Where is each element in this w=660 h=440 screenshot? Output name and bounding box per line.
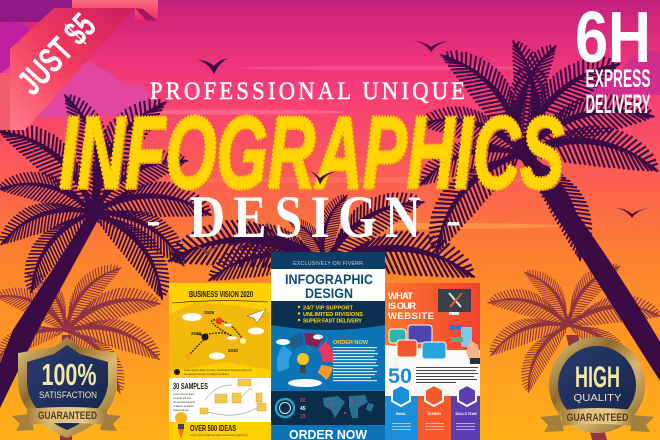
years: 2025 (204, 310, 215, 315)
bullet list: 24/7 VIP SUPPORT (303, 306, 354, 312)
panel: centre infographic card: EXCLUSIVELY ON FIVERR (293, 261, 363, 267)
panel: centre infographic card: DESIGN (305, 286, 353, 301)
panel: left infographic card: ut labore et dolore (173, 404, 194, 408)
card heading: business vision: BUSINESS VISION 2020 (189, 289, 253, 299)
title block (271, 269, 385, 301)
blue body with wave (271, 325, 385, 391)
caption row (174, 369, 180, 375)
panel: left infographic card (169, 283, 271, 440)
icon: small bird over title (305, 170, 338, 185)
badge: 100% satisfaction guaranteed: GUARANTEED (38, 410, 97, 422)
icon: bird far right (615, 208, 650, 218)
palm tree: centre behind cards (165, 174, 481, 285)
panel: centre infographic card: 23 (300, 414, 306, 420)
column labels: SEARCH (427, 412, 441, 416)
card heading: what is our website: WHAT (388, 291, 413, 302)
badge: high quality guaranteed: GUARANTEED (566, 412, 629, 424)
stats strip (271, 391, 385, 425)
panel: right infographic card (385, 283, 480, 440)
100%: 100% (42, 357, 96, 392)
panel: left infographic card: do eiusmod tempor incididunt ut labore (184, 372, 229, 376)
panel: centre infographic card: 45 (300, 406, 306, 412)
clouds on card (182, 313, 202, 321)
icon: bird right (412, 41, 448, 52)
30 samples heading: 30 SAMPLES (173, 382, 208, 391)
big number 50: 50 (388, 365, 412, 388)
panel: left infographic card: Lorem ipsum dolor sit amet, consectetur adipiscing elit sed (184, 368, 252, 372)
icon: light bulb (175, 412, 187, 439)
corner ribbon: just $5 (0, 0, 158, 130)
heading: design: DESIGN (189, 184, 421, 250)
panel: centre infographic card: INFOGRAPHIC (285, 272, 373, 287)
panel: left infographic card: 2020 (191, 331, 202, 336)
chart: world map (323, 395, 374, 418)
bullet list: SUPER FAST DELIVERY (303, 318, 362, 324)
ribbon (27, 407, 107, 425)
panel: left infographic card: magna aliqua (173, 408, 189, 412)
three colour columns (385, 396, 418, 440)
speech bubble tiles (389, 325, 446, 359)
palm tree: main left (0, 80, 215, 408)
stat numbers: 92 (300, 398, 306, 404)
icon: monitor with tools (438, 289, 471, 315)
panel: left infographic card: Lorem ipsum dolor (173, 392, 195, 396)
panel: centre infographic card (271, 252, 385, 440)
panel: left infographic card: Lorem ipsum dolor sit amet consectetur adipiscing (190, 433, 248, 437)
column labels: SKILLS TEAM (455, 412, 477, 416)
footer: order now (271, 425, 385, 440)
badge: high quality guaranteed (540, 337, 654, 433)
paragraph lines (416, 367, 478, 383)
badge: 100% satisfaction guaranteed: SATISFACTION (39, 390, 97, 400)
paper plane (247, 309, 266, 323)
panel: left infographic card: 2030 (228, 348, 239, 353)
timeline route (188, 320, 243, 356)
palm tree: faded lower right (481, 251, 660, 440)
bullet list: UNLIMITED RIVISIONS (303, 312, 363, 318)
over 500 ideas heading: OVER 500 IDEAS (190, 423, 236, 433)
palm tree: faded lower left (0, 251, 169, 440)
column labels (396, 412, 477, 416)
high: HIGH (575, 361, 620, 394)
badge: high quality guaranteed: QUALITY (574, 393, 622, 404)
folders (200, 379, 266, 414)
chart: ring segments with bulb (283, 339, 328, 376)
heading: professional unique: PROFESSIONAL UNIQUE (150, 78, 465, 105)
body text lines (333, 347, 378, 381)
chart: donut (276, 399, 294, 417)
clouds (0, 22, 660, 118)
callout: 6H express delivery (575, 0, 651, 119)
panel: left infographic card: sit amet elit sed (173, 396, 192, 400)
order now label: ORDER NOW (333, 340, 369, 346)
bullet list (298, 306, 363, 324)
icon: hand holding phone (449, 325, 480, 364)
panel: right infographic card: IS OUR (388, 301, 416, 312)
icon: large bird left (197, 58, 228, 74)
column labels: EMAIL (396, 412, 406, 416)
hexagon icons (392, 385, 476, 406)
badge: 100% satisfaction guaranteed (12, 337, 121, 438)
header strip (271, 252, 385, 269)
panel: right infographic card: WEBSITE (388, 311, 434, 322)
ribbon (562, 408, 634, 426)
panel: left infographic card: do eiusmod tempor (173, 400, 195, 404)
palm tree: main right (407, 31, 660, 384)
icon: faded bird centre (190, 245, 225, 256)
